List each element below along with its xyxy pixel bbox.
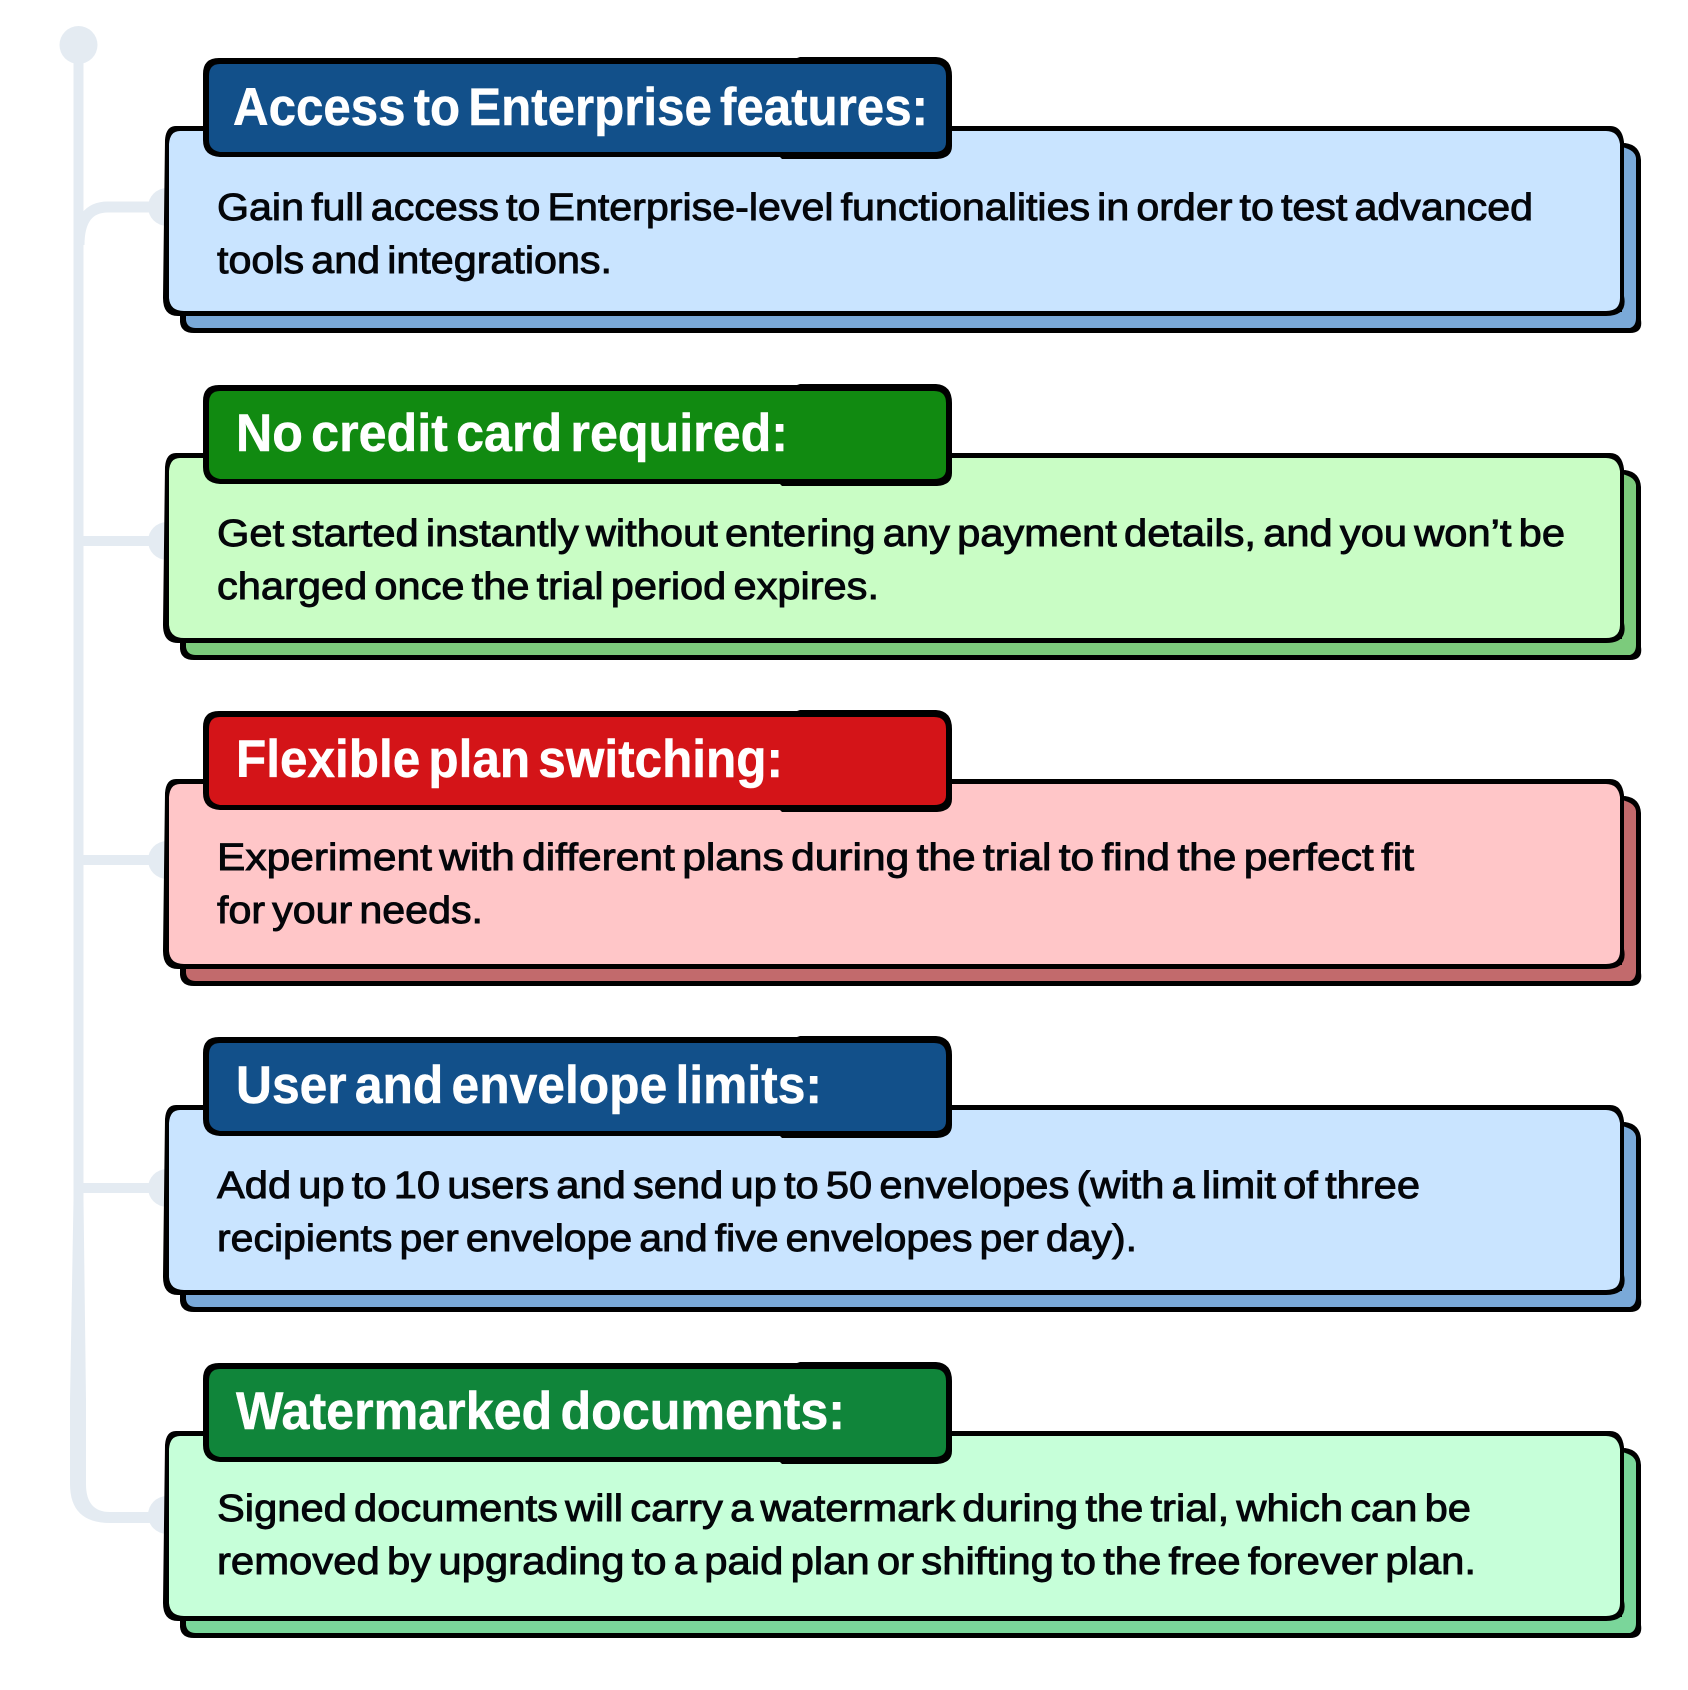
heading: User and envelope limits: (236, 1056, 822, 1115)
body text: recipients per envelope and five envelopes per day). (217, 1218, 1137, 1260)
panel: User and envelope limits (163, 1036, 1641, 1312)
body text (217, 837, 1414, 932)
heading: Flexible plan switching: (236, 730, 783, 789)
heading: No credit card required: (236, 404, 788, 463)
body text: for your needs. (217, 890, 483, 932)
body text: removed by upgrading to a paid plan or shifting to the free forever plan. (217, 1541, 1476, 1583)
body text: Signed documents will carry a watermark during the trial, which can be (217, 1488, 1471, 1530)
timeline connector (60, 26, 186, 1534)
body text: charged once the trial period expires. (217, 566, 879, 608)
panel: Access to Enterprise features (163, 57, 1641, 333)
body text: Gain full access to Enterprise-level functionalities in order to test advanced (217, 187, 1533, 229)
body text (217, 513, 1565, 608)
body text (217, 1165, 1420, 1260)
heading: Watermarked documents: (236, 1382, 845, 1441)
panel: No credit card required (163, 384, 1641, 660)
body text: Add up to 10 users and send up to 50 envelopes (with a limit of three (217, 1165, 1420, 1207)
heading: Access to Enterprise features: (233, 78, 928, 137)
body text: tools and integrations. (217, 240, 612, 282)
panel: Flexible plan switching (163, 710, 1641, 986)
body text: Experiment with different plans during the trial to find the perfect fit (217, 837, 1414, 879)
body text (217, 1488, 1476, 1583)
body text (217, 187, 1533, 282)
panel: Watermarked documents (163, 1362, 1641, 1638)
body text: Get started instantly without entering any payment details, and you won’t be (217, 513, 1565, 555)
